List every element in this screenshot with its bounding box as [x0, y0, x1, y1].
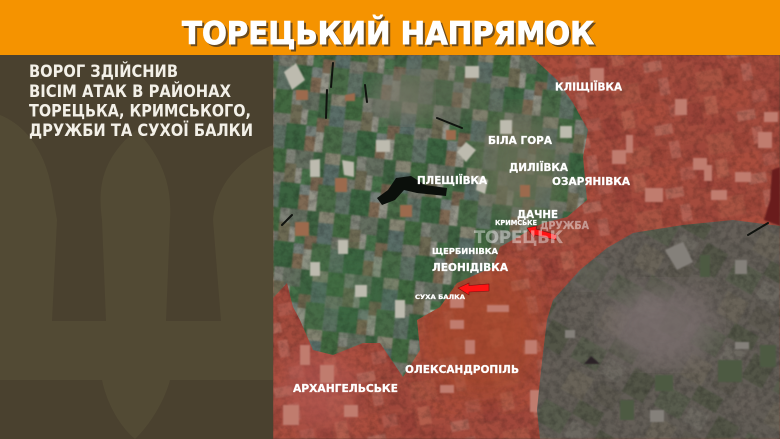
label: Dachne: ДАЧНЕ [517, 209, 558, 221]
text line 2: ВІСІМ АТАК В РАЙОНАХ [29, 82, 231, 101]
title shadow and title text: ТОРЕЦЬКИЙ НАПРЯМОК [184, 18, 596, 54]
label: Oleksandropil: ОЛЕКСАНДРОПІЛЬ [405, 364, 519, 376]
text line 3: ТОРЕЦЬКА, КРИМСЬКОГО, [29, 102, 251, 120]
label: Klishchiivka: КЛІЩІЇВКА [555, 80, 623, 94]
label: Ozarianivka: ОЗАРЯНІВКА [552, 176, 631, 188]
satellite map with control zones [273, 55, 780, 439]
panel: left text background [0, 55, 274, 439]
title banner [0, 0, 780, 55]
label: Dyliivka: ДИЛІЇВКА [509, 160, 569, 174]
trident emblem watermark [0, 115, 273, 439]
town and grey-tan eastern fields [300, 62, 562, 330]
red zone tone and light fields [280, 68, 780, 430]
arrow: attack towards Sukha Balka [458, 283, 489, 295]
pale and dark field patches [284, 63, 572, 320]
label: Leonidivka: ЛЕОНІДІВКА [432, 262, 509, 274]
urban area and green patches [565, 242, 776, 422]
label: Pleshchiivka: ПЛЕЩІЇВКА [417, 173, 488, 187]
label: Sukha Balka: СУХА БАЛКА [415, 293, 465, 301]
text line 4: ДРУЖБИ ТА СУХОЇ БАЛКИ [29, 121, 253, 140]
text line 1: ВОРОГ ЗДІЙСНИВ [29, 62, 178, 81]
label: Bila Hora: БІЛА ГОРА [488, 135, 553, 147]
map labels: settlements [293, 80, 631, 395]
summary text block [29, 62, 253, 140]
label: Krymske: КРИМСЬКЕ [495, 219, 537, 227]
label: Shcherbynivka: ЩЕРБИНІВКА [432, 247, 499, 256]
gray zone: occupied territory [530, 215, 780, 439]
title shadow and title text: ТОРЕЦЬКИЙ НАПРЯМОК [182, 16, 594, 52]
label: Arkhanhelske: АРХАНГЕЛЬСЬКЕ [293, 383, 398, 395]
reservoir near Pleshchiivka [377, 176, 447, 205]
ponds and rivers [282, 63, 768, 235]
green zone: Ukrainian-held territory [273, 55, 603, 385]
label: Toretsk: ТОРЕЦЬК [474, 228, 563, 248]
arrow: attack towards Krymske [527, 226, 557, 240]
label: Druzhba: ДРУЖБА [540, 220, 590, 232]
